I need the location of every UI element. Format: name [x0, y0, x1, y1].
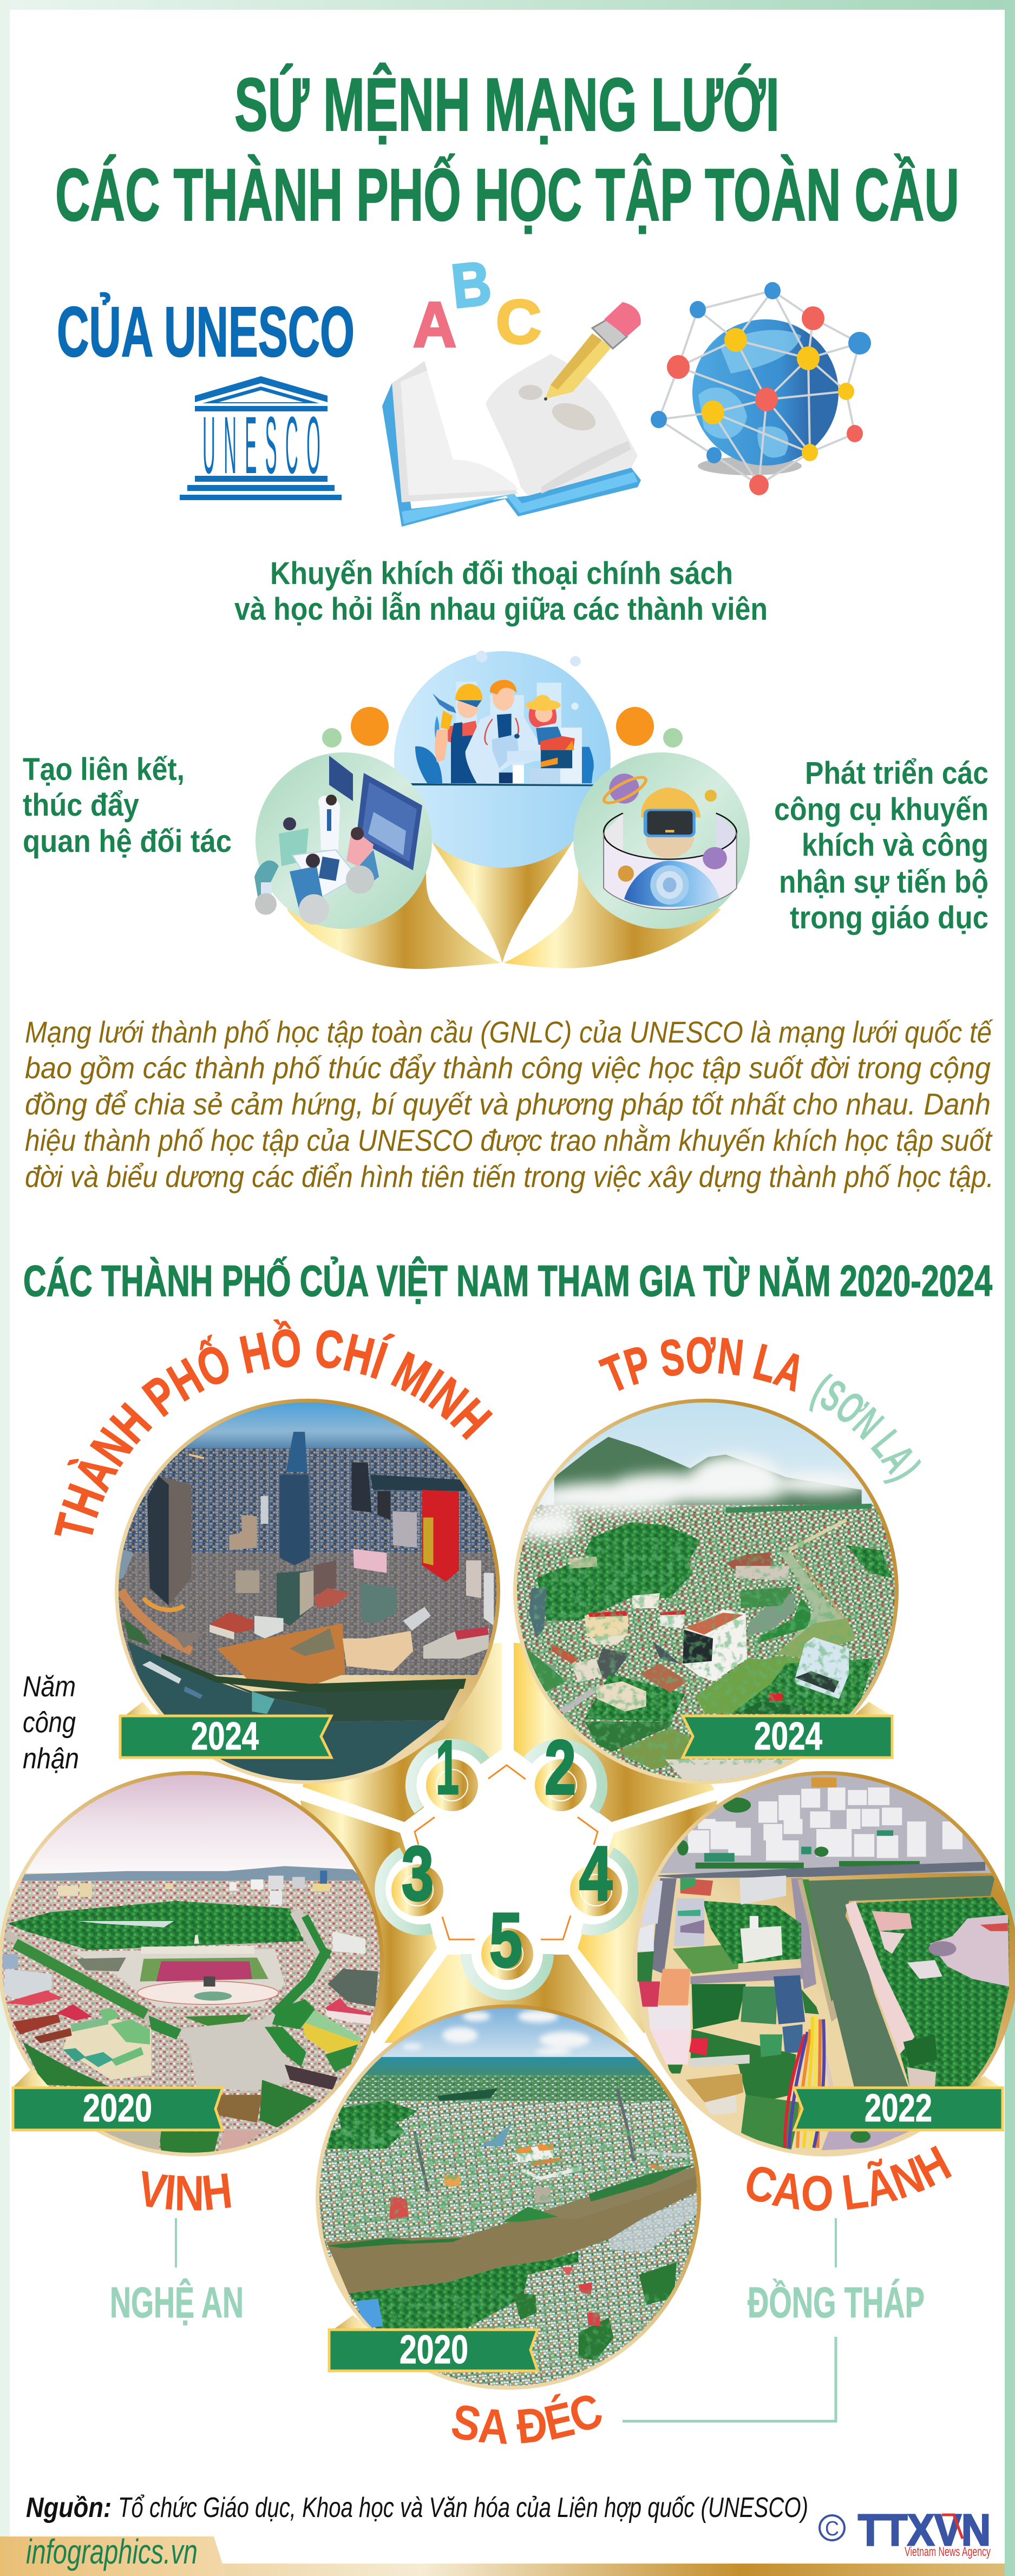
banner: 2024 Son La [683, 1702, 892, 1758]
connector: Cao Lanh to Dong Thap [835, 2218, 837, 2267]
icon: ABC letters: B [448, 248, 494, 321]
logo: copyright TTXVN: TTXVN [858, 2506, 991, 2555]
text: central objective: và học hỏi lẫn nhau giữa các thành viên [234, 592, 768, 627]
text: right objective [774, 756, 988, 935]
banner: 2020 Vinh: 2020 [83, 2087, 152, 2130]
banner: 2022 Cao Lanh [794, 2076, 1003, 2130]
frame: left band [0, 0, 10, 2564]
text: right objective: khích và công [802, 828, 988, 863]
city name arc: Thành phố Hồ Chí Minh: THÀNH PHỐ HỒ CHÍ MINH [54, 1319, 493, 1536]
icon: ABC letters: A [413, 289, 456, 360]
banner: 2020 Sa Dec: 2020 [400, 2327, 468, 2372]
banner: 2024 Son La: 2024 [754, 1715, 822, 1758]
city name arc: Cao Lanh: CAO LÃNH [747, 2146, 952, 2211]
badge 3 [380, 1831, 453, 1930]
source line: Tổ chức Giáo dục, Khoa học và Văn hóa của Liên hợp quốc (UNESCO) [118, 2492, 808, 2523]
photo: Sa Dec [311, 2000, 706, 2390]
icon: UNESCO temple logo [180, 376, 342, 500]
city name arc: Sa Dec: SA ĐÉC [451, 2394, 602, 2444]
city name arc: TP Sơn La: TP SƠN LA [598, 1337, 799, 1392]
badge 4 [560, 1831, 633, 1930]
gold star segments [300, 1643, 717, 2043]
icon: ABC letters [413, 248, 541, 360]
icon: ABC letters: C [496, 288, 541, 357]
text: right objective: Phát triển các [805, 756, 988, 791]
text: right objective: nhận sự tiến bộ [779, 864, 988, 900]
connector lines in white pentagon [415, 1765, 598, 1939]
logo: copyright TTXVN: C [825, 2518, 839, 2540]
photo: Cao Lanh [620, 1767, 1015, 2157]
province label: Nghe An: NGHỆ AN [110, 2278, 244, 2326]
footer tab [0, 2536, 226, 2576]
frame: top band [0, 0, 1015, 10]
footer strip [0, 2564, 1005, 2576]
icon: globe network [651, 282, 871, 495]
badge 2 [525, 1725, 602, 1821]
circle: partnership meeting illustration [254, 752, 432, 929]
badge 3: 3 [402, 1831, 434, 1917]
icon: open book with pencil [382, 302, 641, 527]
title [55, 63, 959, 237]
city name arc: Vinh: VINH [142, 2171, 231, 2211]
note: year recognised: công [23, 1706, 76, 1739]
photo: Ho Chi Minh City [108, 1397, 503, 1784]
logo: copyright TTXVN [820, 2506, 991, 2559]
note: year recognised [23, 1670, 79, 1775]
text: left objective: Tạo liên kết, [23, 752, 185, 787]
banner: 2024 Ho Chi Minh City: 2024 [191, 1715, 259, 1758]
text: central objective [234, 556, 768, 627]
note: year recognised: nhận [23, 1742, 79, 1775]
badge 4: 4 [579, 1831, 612, 1917]
badge 2: 2 [545, 1725, 576, 1811]
province label: Dong Thap: ĐỒNG THÁP [748, 2278, 925, 2326]
text: right objective: trong giáo dục [790, 900, 988, 935]
province arc: Sơn La: (SƠN LA) [809, 1374, 921, 1484]
frame: right band [1005, 0, 1015, 2576]
text: central objective: Khuyến khích đối thoại chính sách [270, 556, 733, 591]
text: left objective: thúc đẩy [23, 788, 139, 823]
website label: infographics.vn [26, 2532, 198, 2571]
badge 1: 1 [436, 1725, 459, 1811]
gold leaves under the three circles [287, 812, 721, 969]
badge 5 [466, 1897, 548, 1995]
source line: Nguồn: [26, 2492, 112, 2523]
connector: Vinh to Nghe An [175, 2218, 177, 2267]
circle: workforce illustration [394, 651, 611, 868]
circle: VR education tools illustration [573, 752, 750, 929]
decorative dots [322, 707, 683, 748]
connector: Dong Thap to Sa Dec [623, 2337, 836, 2421]
note: year recognised: Năm [23, 1670, 76, 1703]
text: GNLC description [25, 1015, 994, 1194]
text: left objective [23, 752, 232, 859]
badge 5: 5 [489, 1897, 522, 1983]
icon: UNESCO temple logo: UNESCO [202, 401, 320, 491]
banner: 2020 Vinh [13, 2068, 222, 2130]
banner: 2024 Ho Chi Minh City [120, 1702, 331, 1758]
banner: 2022 Cao Lanh: 2022 [865, 2087, 932, 2130]
subtitle: của UNESCO: CỦA UNESCO [57, 292, 355, 371]
photo: Son La [509, 1397, 904, 1784]
photo: Vinh [0, 1767, 395, 2157]
text: left objective: quan hệ đối tác [23, 824, 232, 859]
text: right objective: công cụ khuyến [774, 792, 988, 827]
banner: 2020 Sa Dec [329, 2315, 538, 2372]
badge 1 [411, 1725, 488, 1821]
